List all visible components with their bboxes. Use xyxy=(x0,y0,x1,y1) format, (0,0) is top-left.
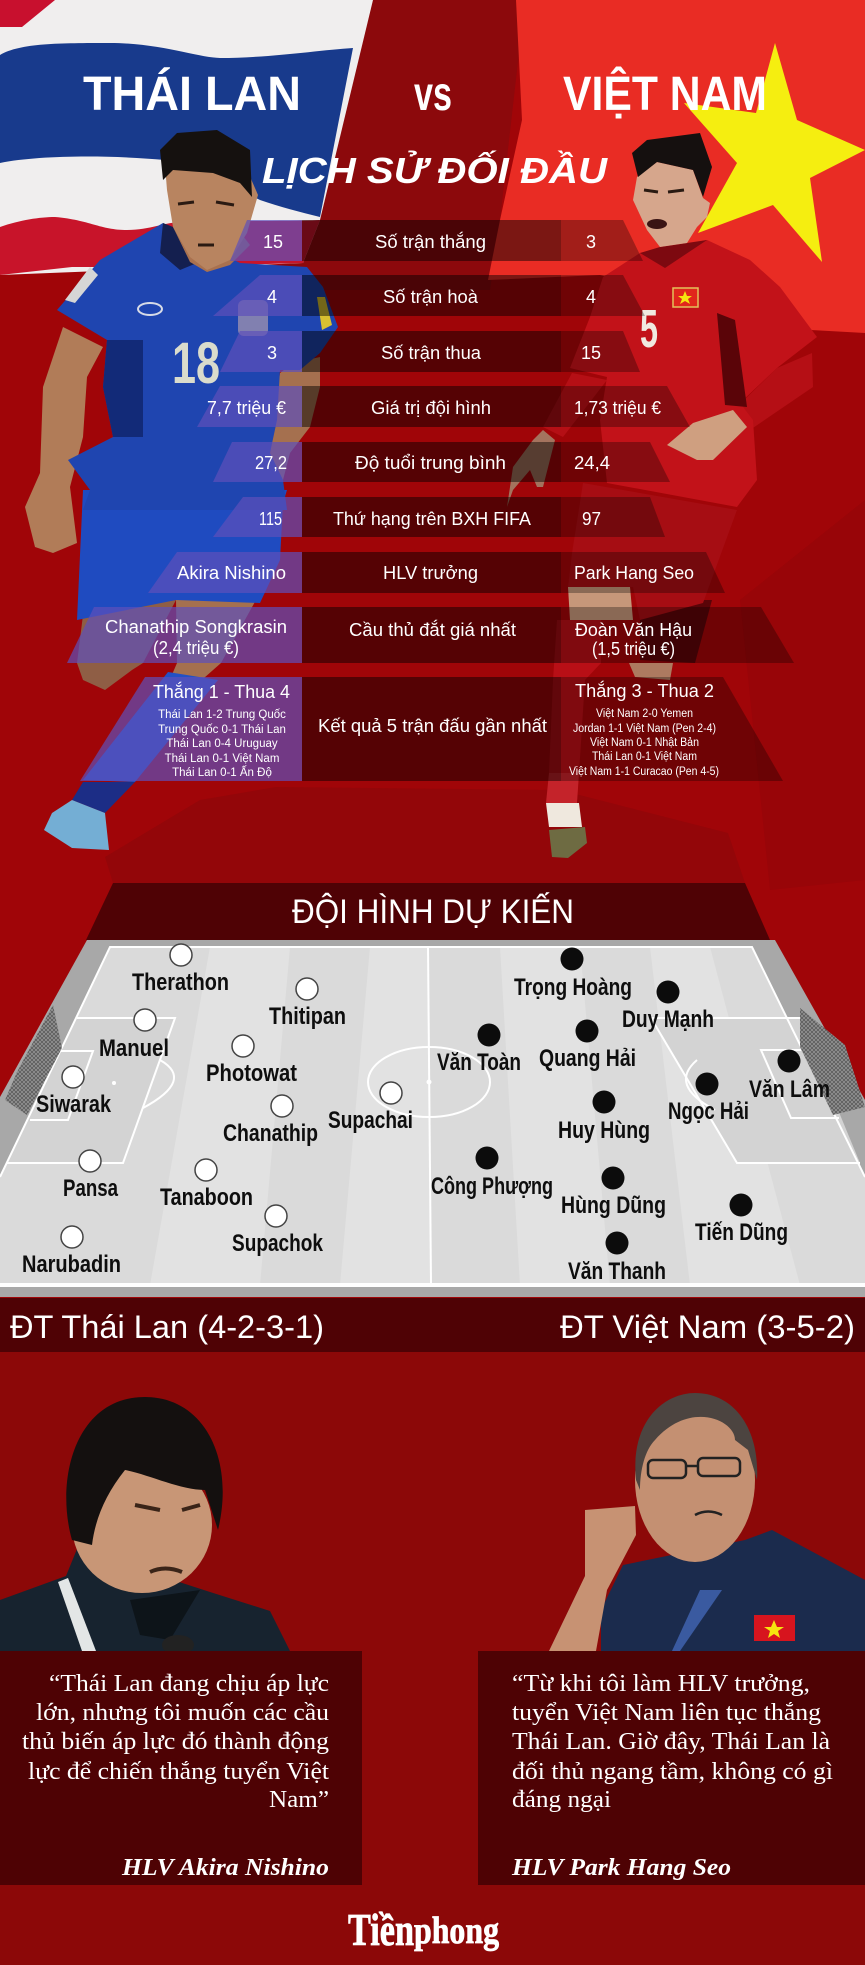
left team bars xyxy=(67,220,302,781)
row labels: Cầu thủ đắt giá nhất xyxy=(349,619,516,640)
row labels: Giá trị đội hình xyxy=(371,398,491,418)
Vietnam values: 3 xyxy=(586,232,596,252)
team formation band: ĐT Thái Lan (4-2-3-1) xyxy=(10,1309,324,1345)
Thailand players xyxy=(22,944,413,1278)
Vietnam recent results xyxy=(569,708,719,778)
Vietnam values: Thắng 3 - Thua 2 xyxy=(575,680,714,701)
team formation band: ĐT Việt Nam (3-5-2) xyxy=(560,1309,855,1345)
Thailand values: 115 xyxy=(259,509,282,529)
player: Thailand number 18: 18 xyxy=(172,331,220,396)
Thailand players: Siwarak xyxy=(36,1091,112,1118)
row labels: Số trận thắng xyxy=(375,231,486,252)
quote text: đáng ngại xyxy=(512,1787,611,1813)
Vietnam values: 15 xyxy=(581,343,601,363)
Vietnam recent results: Việt Nam 0-1 Nhật Bản xyxy=(590,737,699,749)
Vietnam players xyxy=(431,948,830,1285)
Vietnam players: Duy Mạnh xyxy=(622,1006,714,1033)
team formation band xyxy=(0,1298,865,1352)
Vietnam players: Trọng Hoàng xyxy=(514,974,632,1001)
Thailand values: 3 xyxy=(267,343,277,363)
Thailand values: 7,7 triệu € xyxy=(207,398,286,418)
Thailand values: (2,4 triệu €) xyxy=(153,638,239,658)
quote text: Nam” xyxy=(269,1787,329,1813)
Vietnam values: 97 xyxy=(582,509,601,529)
quote text: đối thủ ngang tầm, không có gì xyxy=(512,1759,833,1785)
row labels: Độ tuổi trung bình xyxy=(355,453,506,473)
Thailand players: Tanaboon xyxy=(160,1184,253,1211)
Vietnam values xyxy=(574,232,714,701)
Thailand recent results xyxy=(158,709,286,779)
quote text: “Từ khi tôi làm HLV trưởng, xyxy=(512,1671,810,1697)
row labels: HLV trưởng xyxy=(383,563,478,583)
right team bars xyxy=(561,220,794,781)
Thailand players: Manuel xyxy=(99,1035,169,1062)
title: team names: THÁI LAN xyxy=(83,67,301,121)
Thailand values: 4 xyxy=(267,287,277,307)
quote text: lớn, nhưng tôi muốn các cầu xyxy=(36,1700,329,1726)
flag: Thailand xyxy=(0,0,373,275)
quote text: lực để chiến thắng tuyển Việt xyxy=(28,1759,329,1785)
Thailand recent results: Trung Quốc 0-1 Thái Lan xyxy=(158,724,286,736)
football pitch xyxy=(0,940,865,1297)
Vietnam players: Công Phượng xyxy=(431,1173,553,1200)
player: Vietnam number 5: 5 xyxy=(640,299,658,359)
Vietnam values: Park Hang Seo xyxy=(574,563,694,583)
Thailand players: Supachai xyxy=(328,1107,413,1134)
logo: Tiền Phong: Tiền xyxy=(348,1904,414,1955)
player: Thailand number 18 xyxy=(25,130,338,850)
quote attribution: HLV Park Hang Seo xyxy=(511,1855,731,1881)
Thailand values: 27,2 xyxy=(255,453,287,473)
row labels: Số trận hoà xyxy=(383,287,479,307)
heading: expected lineup: ĐỘI HÌNH DỰ KIẾN xyxy=(292,893,574,931)
quote text: Thái Lan. Giờ đây, Thái Lan là xyxy=(512,1729,830,1755)
Vietnam players: Văn Toàn xyxy=(437,1049,521,1076)
Thailand players: Chanathip xyxy=(223,1120,318,1147)
Thailand recent results: Thái Lan 0-1 Việt Nam xyxy=(165,753,279,765)
Vietnam recent results: Jordan 1-1 Việt Nam (Pen 2-4) xyxy=(573,723,716,735)
player: Vietnam number 5 xyxy=(507,133,817,858)
Vietnam values: 24,4 xyxy=(574,453,610,473)
Thailand players: Supachok xyxy=(232,1230,324,1257)
logo: Tiền Phong xyxy=(348,1904,499,1955)
quote text: thủ biến áp lực đó thành động xyxy=(22,1729,329,1755)
logo: Tiền Phong: phong xyxy=(414,1910,499,1952)
quote attribution: HLV Akira Nishino xyxy=(121,1855,329,1881)
Vietnam values: 4 xyxy=(586,287,596,307)
Thailand values: Thắng 1 - Thua 4 xyxy=(153,681,290,702)
left goal xyxy=(5,1005,62,1115)
row labels: Kết quả 5 trận đấu gần nhất xyxy=(318,716,547,736)
quote text xyxy=(512,1671,833,1813)
Thailand players: Thitipan xyxy=(269,1003,346,1030)
title: head to head history: LỊCH SỬ ĐỐI ĐẦU xyxy=(262,149,608,191)
stats comparison table xyxy=(67,220,794,781)
Thailand players: Photowat xyxy=(206,1060,297,1087)
quote panel: Akira Nishino xyxy=(0,1651,362,1885)
title: team names xyxy=(83,66,767,121)
Thailand values: 15 xyxy=(263,232,283,252)
Thailand recent results: Thái Lan 1-2 Trung Quốc xyxy=(158,709,286,721)
right goal xyxy=(800,1008,865,1115)
Vietnam players: Quang Hải xyxy=(539,1045,636,1072)
quote text xyxy=(22,1671,329,1813)
quote text: tuyển Việt Nam liên tục thắng xyxy=(512,1700,821,1726)
Vietnam values: 1,73 triệu € xyxy=(574,398,661,418)
row labels xyxy=(318,231,547,736)
Vietnam players: Hùng Dũng xyxy=(561,1192,666,1219)
flag: Vietnam xyxy=(488,0,865,333)
Vietnam recent results: Việt Nam 1-1 Curacao (Pen 4-5) xyxy=(569,766,719,778)
Thailand players: Narubadin xyxy=(22,1251,121,1278)
title: team names: vs xyxy=(414,68,452,121)
center label bars xyxy=(302,220,561,781)
row labels: Thứ hạng trên BXH FIFA xyxy=(333,509,531,529)
Thailand values: Chanathip Songkrasin xyxy=(105,617,287,637)
Thailand values: Akira Nishino xyxy=(177,563,286,583)
Vietnam recent results: Việt Nam 2-0 Yemen xyxy=(596,708,693,720)
Thailand recent results: Thái Lan 0-1 Ấn Độ xyxy=(172,766,272,779)
Vietnam values: Đoàn Văn Hậu xyxy=(575,620,692,640)
Thailand players: Therathon xyxy=(132,969,229,996)
heading: expected lineup xyxy=(86,883,770,940)
quote panel: Park Hang Seo xyxy=(478,1651,865,1885)
row labels: Số trận thua xyxy=(381,343,482,363)
Vietnam recent results: Thái Lan 0-1 Việt Nam xyxy=(592,751,697,763)
Thailand recent results: Thái Lan 0-4 Uruguay xyxy=(166,738,278,750)
Vietnam players: Tiến Dũng xyxy=(695,1219,788,1246)
Vietnam players: Văn Thanh xyxy=(568,1258,666,1285)
Vietnam players: Văn Lâm xyxy=(749,1076,830,1103)
Vietnam values: (1,5 triệu €) xyxy=(592,639,675,659)
title: team names: VIỆT NAM xyxy=(563,66,767,121)
coach photo: Akira Nishino xyxy=(0,1397,290,1655)
quote text: “Thái Lan đang chịu áp lực xyxy=(49,1671,329,1697)
coach photo: Park Hang Seo xyxy=(549,1393,865,1651)
Vietnam players: Huy Hùng xyxy=(558,1117,650,1144)
Vietnam players: Ngọc Hải xyxy=(668,1098,749,1125)
Thailand values xyxy=(105,232,290,702)
Thailand players: Pansa xyxy=(63,1175,119,1202)
